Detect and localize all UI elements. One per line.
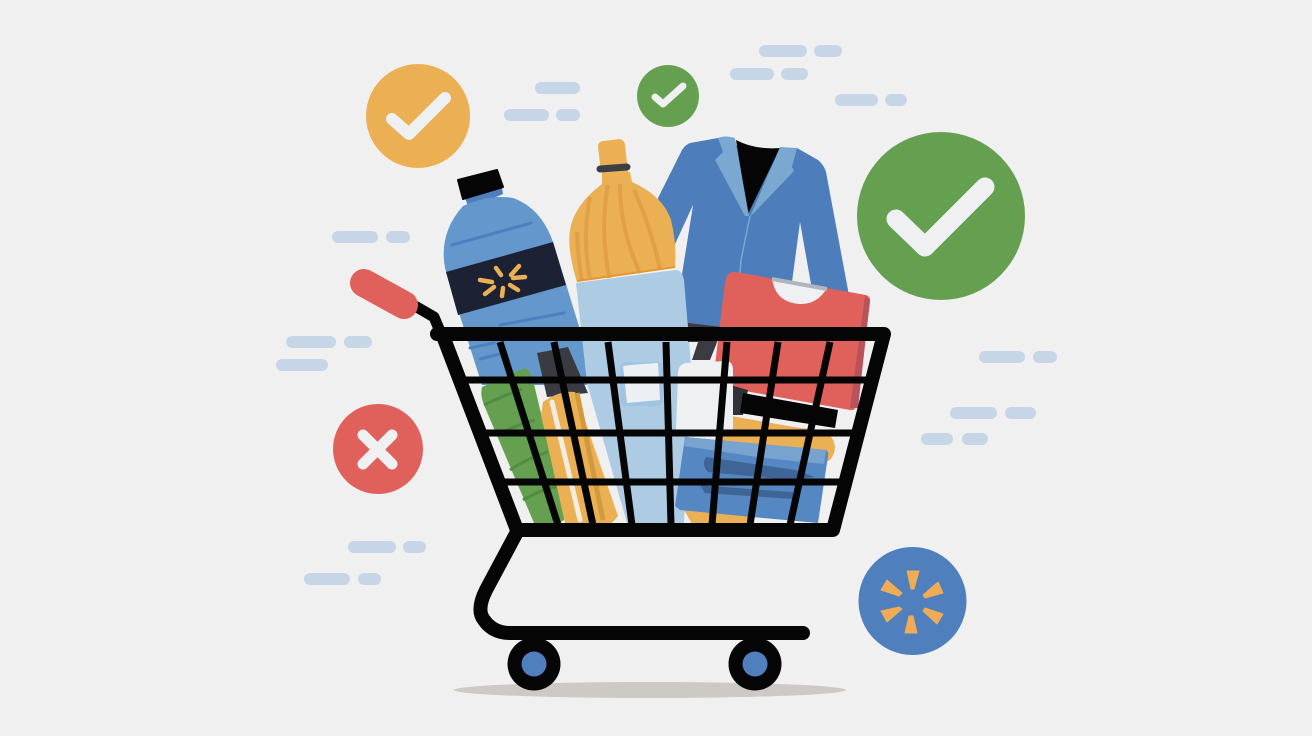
icon: red cross badge [333,404,423,494]
black band [740,393,838,428]
white box [676,361,733,432]
blue box [675,437,828,524]
jacket [658,136,855,330]
icon: small green check badge [637,65,699,127]
wheel left [508,638,560,690]
cart handle grip [364,283,404,305]
red shirt package [688,272,870,415]
wheel right [728,638,782,690]
water bottle [444,170,590,385]
light blue container [576,270,691,523]
floating dashes [276,45,1057,585]
green package [481,368,566,523]
ground shadow [454,682,846,698]
icon: blue spark badge [858,547,966,655]
cart basket rails [437,334,884,530]
orange tube [541,392,618,523]
orange package [720,415,835,470]
orange bottle [569,139,676,282]
icon: orange check badge [366,64,470,168]
icon: large green check badge [857,132,1025,300]
dark item [537,347,588,397]
shopping cart frame [415,306,884,633]
